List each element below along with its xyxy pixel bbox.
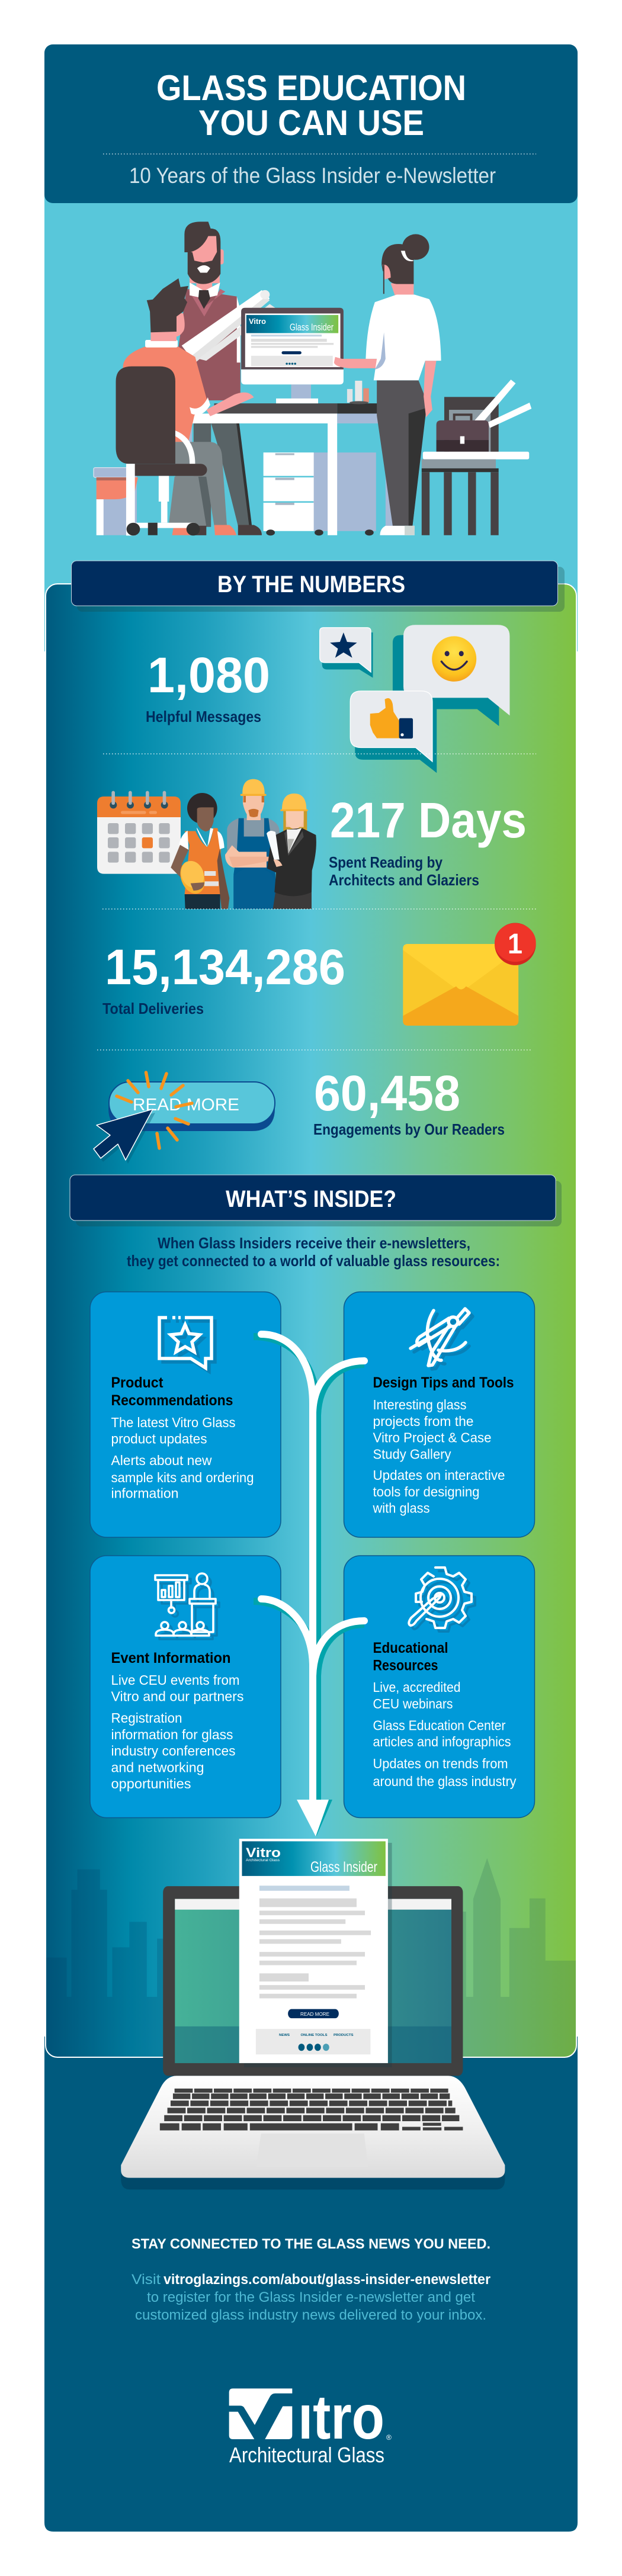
label: Helpful Messages: [146, 708, 261, 725]
card: product recommendations: Recommendations: [111, 1392, 233, 1409]
blueprint rolls: [182, 290, 277, 362]
number: 1,080: [148, 647, 270, 703]
monitor mini logo: Vitro: [249, 317, 266, 326]
model buildings: [347, 381, 369, 404]
banner: by the numbers: [71, 561, 565, 612]
card: educational resources: [344, 1556, 534, 1818]
intro text: [127, 1234, 500, 1270]
laptop base: [121, 2076, 505, 2178]
card body: industry conferences: [111, 1743, 236, 1759]
illustration: calendar and workers: [97, 779, 316, 909]
card body: Study Gallery: [373, 1446, 451, 1462]
logo: Vitro: [229, 2382, 392, 2467]
registered mark: ®: [386, 2433, 392, 2442]
label: Engagements by Our Readers: [313, 1120, 505, 1138]
monitor newsletter title: Glass Insider: [290, 322, 334, 333]
card body: projects from the: [373, 1414, 474, 1429]
newsletter header text: NEWS: [279, 2034, 290, 2037]
stat: total deliveries: [102, 939, 345, 1017]
smiley bubble: [393, 625, 509, 726]
card heading: Educational: [373, 1640, 448, 1656]
call to action body: Visit: [132, 2272, 161, 2288]
card body: Vitro and our partners: [111, 1689, 244, 1704]
badge number: 1: [508, 929, 522, 960]
icon: star speech bubble: [159, 1318, 211, 1368]
stat: 217 days: [329, 792, 527, 889]
panel: gradient content: [46, 584, 576, 2057]
laptop shadow: [121, 2172, 505, 2189]
card body: information: [111, 1485, 179, 1501]
seated man: [123, 278, 254, 535]
card: product recommendations: [90, 1292, 281, 1537]
desk rear and cabinet: [264, 413, 393, 535]
stat: helpful messages: [146, 647, 270, 725]
newsletter header text: ONLINE TOOLS: [301, 2034, 328, 2037]
notification badge: [495, 923, 536, 965]
card body: with glass: [373, 1501, 430, 1516]
logo wordmark: ıtro: [298, 2382, 384, 2452]
illustration: office scene: [94, 221, 531, 535]
card body: Glass Education Center: [373, 1717, 506, 1733]
card heading: Design Tips and Tools: [373, 1374, 514, 1391]
label: Spent Reading by: [329, 853, 443, 871]
banner: what's inside: [70, 1175, 562, 1226]
card body: articles and infographics: [373, 1734, 511, 1749]
card body: tools for designing: [373, 1484, 480, 1499]
read more button: [94, 1072, 275, 1164]
standing woman: [334, 234, 441, 535]
document shadow: [244, 1843, 392, 2067]
card body: product updates: [111, 1431, 207, 1446]
woman in black jacket: [267, 794, 316, 909]
icon: compass: [411, 1309, 469, 1366]
label: Total Deliveries: [102, 1000, 204, 1017]
icon: envelope with notification: [403, 923, 536, 1026]
icon: chat bubbles: [320, 625, 509, 773]
newsletter header text: [246, 1845, 377, 2037]
card body: [373, 1397, 505, 1516]
office chair: [116, 367, 207, 535]
card body: around the glass industry: [373, 1774, 517, 1789]
number: 217 Days: [330, 792, 527, 848]
intro text: they get connected to a world of valuable glass resources:: [127, 1252, 500, 1270]
card: educational resources: Resources: [373, 1657, 438, 1674]
label line 2: Architects and Glaziers: [329, 871, 479, 889]
title line 1: GLASS EDUCATION: [156, 68, 466, 108]
newsletter header text: READ MORE: [300, 2012, 329, 2017]
card body: [111, 1672, 244, 1791]
card body: opportunities: [111, 1776, 191, 1791]
background: light teal section: [44, 178, 578, 651]
thumbs up bubble: [350, 691, 437, 773]
icon: cursor: [94, 1109, 155, 1164]
title line 2: YOU CAN USE: [198, 103, 424, 143]
newsletter header text: PRODUCTS: [334, 2034, 354, 2037]
laptop: [121, 1839, 505, 2189]
trackpad: [257, 2134, 368, 2167]
call to action body: vitroglazings.com/about/glass-insider-enewsletter: [163, 2272, 490, 2288]
call to action body: [132, 2272, 490, 2323]
card body: Updates on trends from: [373, 1756, 508, 1771]
newsletter header text: Architectural Glass: [246, 1859, 280, 1862]
calendar: [97, 791, 181, 874]
desk: [189, 403, 379, 535]
monitor: [241, 308, 344, 403]
card body: Vitro Project & Case: [373, 1430, 492, 1445]
stool and briefcase: [422, 380, 531, 535]
subtitle: 10 Years of the Glass Insider e-Newsletter: [129, 163, 496, 188]
card heading: Event Information: [111, 1650, 231, 1666]
card body: sample kits and ordering: [111, 1470, 254, 1485]
card body: and networking: [111, 1760, 204, 1775]
newsletter header text: Vitro: [246, 1845, 281, 1860]
number: 60,458: [314, 1065, 460, 1121]
banner heading: WHAT’S INSIDE?: [226, 1186, 396, 1212]
intro text: When Glass Insiders receive their e-newsletters,: [158, 1234, 470, 1252]
card body: Registration: [111, 1710, 182, 1726]
card body: [373, 1679, 517, 1789]
card body: Updates on interactive: [373, 1467, 505, 1483]
icon: presentation: [155, 1573, 216, 1636]
card heading: Product: [111, 1374, 163, 1391]
card: design tips: [344, 1292, 534, 1537]
call to action body: customized glass industry news delivered to your inbox.: [135, 2307, 486, 2323]
card body: The latest Vitro Glass: [111, 1415, 236, 1430]
star bubble: [320, 628, 373, 678]
card body: CEU webinars: [373, 1696, 453, 1711]
card: event information: [90, 1556, 281, 1818]
card body: Live, accredited: [373, 1679, 461, 1695]
standing man: [178, 221, 262, 535]
keyboard: [164, 2090, 459, 2118]
number: 15,134,286: [105, 939, 345, 995]
newsletter header text: Glass Insider: [310, 1859, 377, 1875]
laptop screen: [163, 1886, 463, 2076]
newsletter document: [239, 1839, 388, 2063]
logo tagline: Architectural Glass: [229, 2443, 384, 2467]
arrow: branching tree: [254, 1334, 364, 1836]
call to action: [132, 2236, 490, 2323]
icon: gear with target: [409, 1568, 472, 1628]
background: dark footer section: [44, 2037, 578, 2532]
skyline: [46, 1858, 579, 2057]
stat: engagements: [313, 1065, 505, 1138]
click sparks: [117, 1072, 192, 1148]
trash bin: [94, 468, 138, 535]
card body: Live CEU events from: [111, 1672, 239, 1688]
banner heading: BY THE NUMBERS: [217, 571, 405, 598]
card body: information for glass: [111, 1727, 233, 1742]
card body: Interesting glass: [373, 1397, 467, 1412]
card body: Alerts about new: [111, 1453, 212, 1468]
call to action body: to register for the Glass Insider e-newsletter and get: [147, 2289, 475, 2305]
worker with safety vest: [171, 793, 229, 909]
panel: header: [44, 44, 578, 203]
worker with overalls: [225, 779, 280, 909]
button text: READ MORE: [133, 1096, 239, 1114]
call to action heading: STAY CONNECTED TO THE GLASS NEWS YOU NEED.: [132, 2236, 490, 2252]
card body: [111, 1415, 254, 1501]
